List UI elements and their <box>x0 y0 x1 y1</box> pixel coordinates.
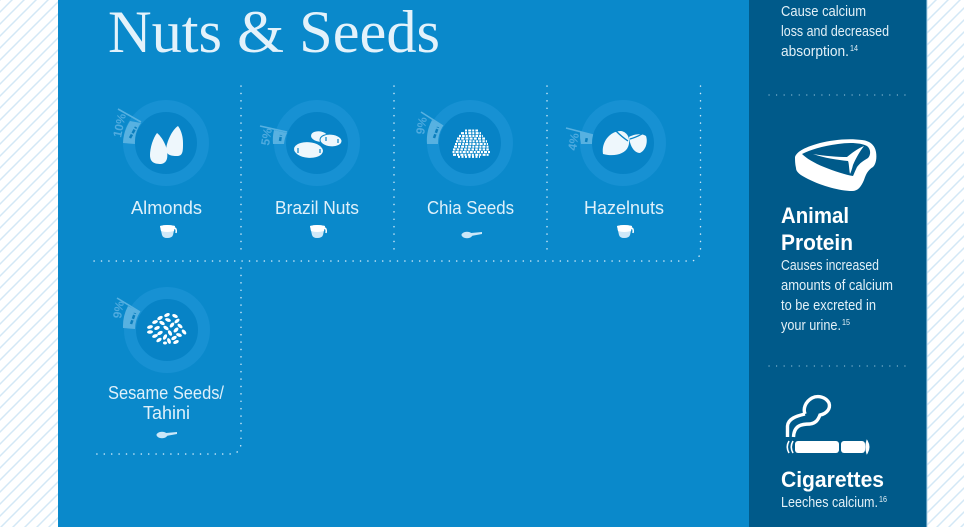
sesame label: Sesame Seeds/ <box>108 382 225 403</box>
text block: cause calcium loss: loss and decreased <box>781 24 889 40</box>
panel: nuts and seeds <box>58 0 749 527</box>
sesame ring <box>130 293 204 367</box>
icon: steak <box>795 139 876 191</box>
icon: measuring cup <box>310 225 326 238</box>
text block: cause calcium loss: 14 <box>850 44 858 53</box>
icon: spoon <box>462 232 482 238</box>
icon: hazelnuts <box>603 131 647 155</box>
card: chia seeds <box>413 106 514 238</box>
sesame percentage wedge: 9% <box>110 300 127 320</box>
sesame label <box>108 382 225 423</box>
card: sesame seeds / tahini <box>108 293 225 438</box>
text block: animal protein description: Causes increased <box>781 258 879 274</box>
hazelnut ring <box>586 106 660 180</box>
icon: cigarette <box>787 397 869 453</box>
title: Nuts & Seeds <box>108 0 440 65</box>
text block: cause calcium loss <box>781 4 889 60</box>
heading: animal protein <box>781 203 853 255</box>
icon: sesame seeds <box>147 312 187 345</box>
icon: spoon <box>156 432 177 438</box>
card: brazil nuts <box>258 106 359 238</box>
almond label: Almonds <box>131 197 202 218</box>
heading: animal protein: Animal <box>781 203 849 228</box>
text block: animal protein description: to be excreted in <box>781 298 876 314</box>
text block: animal protein description: amounts of calcium <box>781 278 893 294</box>
text block: cigarettes description: 16 <box>879 495 887 504</box>
hazelnut percentage wedge: 4% <box>565 132 582 152</box>
text block: cause calcium loss: absorption. <box>781 44 849 60</box>
panel: calcium depleters sidebar <box>749 0 926 527</box>
chia percentage wedge: 9% <box>413 116 430 136</box>
hazelnuts label: Hazelnuts <box>584 197 664 218</box>
heading: cigarettes: Cigarettes <box>781 467 884 492</box>
sesame percentage wedge <box>110 298 140 329</box>
text block: animal protein description: 15 <box>842 318 850 327</box>
text block: cause calcium loss: Cause calcium <box>781 4 866 20</box>
almond ring <box>129 106 203 180</box>
brazil nut ring <box>280 106 354 180</box>
brazil nut percentage wedge: 5% <box>258 127 275 147</box>
card: almonds <box>110 106 203 238</box>
chia ring <box>433 106 507 180</box>
sesame label: Tahini <box>143 402 190 423</box>
text block: animal protein description <box>781 258 893 334</box>
icon: brazil nuts <box>293 130 343 159</box>
chia seeds label: Chia Seeds <box>427 197 514 218</box>
icon: almonds <box>150 126 183 164</box>
text block: cigarettes description: Leeches calcium. <box>781 495 878 511</box>
icon: measuring cup <box>160 225 176 238</box>
icon: chia seeds <box>452 130 491 157</box>
text block: animal protein description: your urine. <box>781 318 841 334</box>
card: hazelnuts <box>565 106 664 238</box>
brazil nuts label: Brazil Nuts <box>275 197 359 218</box>
icon: measuring cup <box>617 225 633 238</box>
heading: animal protein: Protein <box>781 230 853 255</box>
almond percentage wedge: 10% <box>110 112 129 139</box>
